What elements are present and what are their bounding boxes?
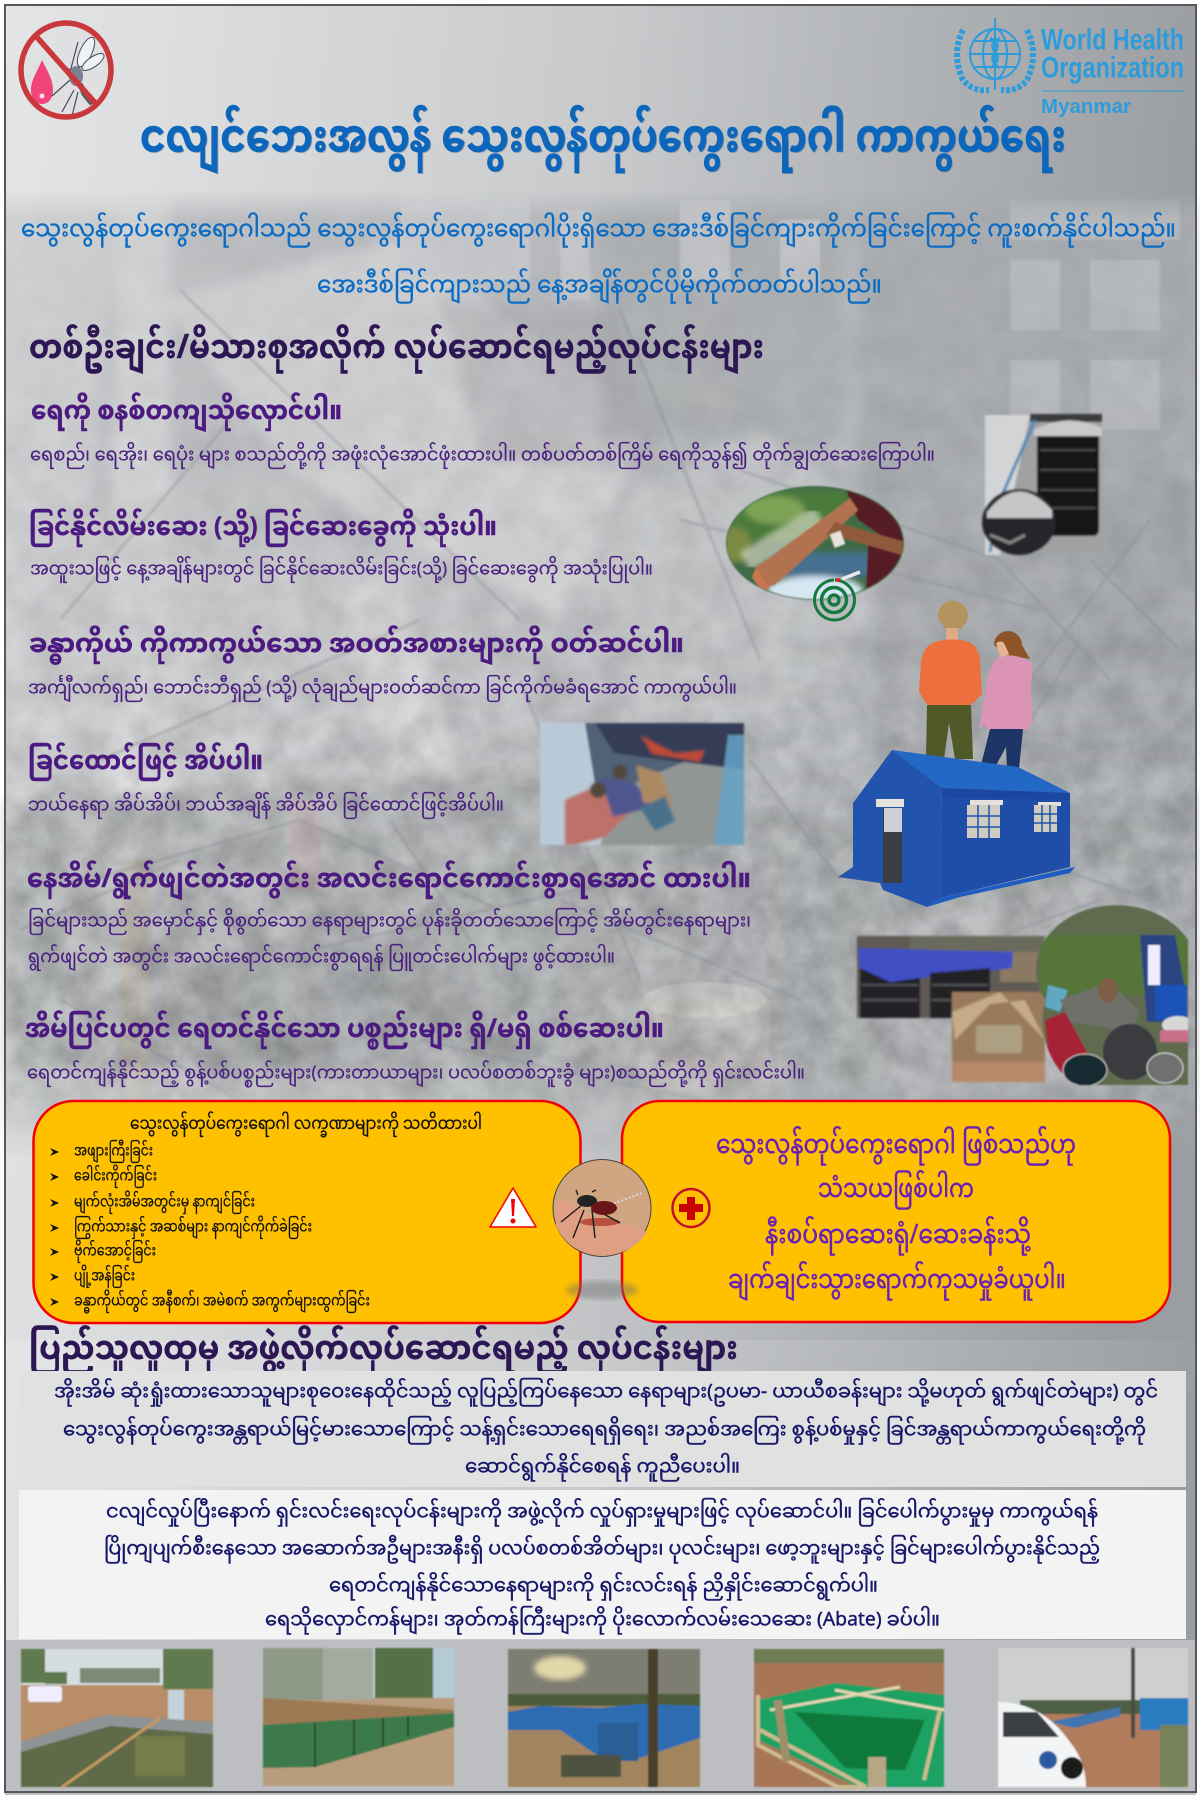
photo: lined wooden tank	[754, 1649, 944, 1787]
photo: applying repellent spray	[719, 486, 910, 604]
logo: WHO Myanmar	[957, 18, 1185, 118]
section: clothing	[28, 619, 737, 710]
section: repellent: အထူးသဖြင့် နေ့အချိန်များတွင် ခြင်နိုင်ဆေးလိမ်းခြင်း(သို့) ခြင်ဆေးခွေကို အသုံးပြုပါ။	[30, 552, 653, 590]
panel: seek care: သွေးလွန်တုပ်ကွေးရောဂါ ဖြစ်သည်ဟု	[716, 1120, 1076, 1176]
panel: crowded settings: ဆောင်ရွက်နိုင်စေရန် ကူညီပေးပါ။	[465, 1448, 740, 1490]
section: mosquito net: ဘယ်နေရာ အိပ်အိပ်၊ ဘယ်အချိန် အိပ်အိပ် ခြင်ထောင်ဖြင့်အိပ်ပါ။	[28, 788, 504, 826]
photo: cleaning water jars	[1036, 905, 1200, 1086]
symptoms list: ခေါင်းကိုက်ခြင်း	[74, 1160, 157, 1194]
photo: green water tanks	[263, 1648, 454, 1786]
section: light in tents: ရွက်ဖျင်တဲ အတွင်း အလင်းရောင်ကောင်းစွာရရန် ပြူတင်းပေါက်များ ဖွင့်ထားပါ။	[28, 940, 615, 978]
panel: seek care	[622, 1101, 1170, 1322]
section: clothing: အင်္ကျီလက်ရှည်၊ ဘောင်းဘီရှည် (သို့) လုံချည်များဝတ်ဆင်ကာ ခြင်ကိုက်မခံရအောင် ကာကွယ်ပါ။	[28, 670, 737, 710]
section: repellent: ခြင်နိုင်လိမ်းဆေး (သို့) ခြင်ဆေးခွေကို သုံးပါ။	[29, 502, 497, 558]
photo: tires and open well	[857, 936, 1045, 1082]
panel: seek care: နီးစပ်ရာဆေးရုံ/ဆေးခန်းသို့	[765, 1210, 1031, 1266]
section: mosquito net	[28, 736, 504, 826]
symptoms list: ဗိုက်အောင့်ခြင်း	[74, 1236, 156, 1268]
intro text: သွေးလွန်တုပ်ကွေးရောဂါသည် သွေးလွန်တုပ်ကွေးရောဂါပိုးရှိသော အေးဒီစ်ခြင်ကျားကိုက်ခြင်းကြောင့် ကူးစက်နိုင်ပါသည်။	[21, 204, 1176, 258]
panel: symptoms	[34, 1101, 580, 1323]
illustration: blue tent	[838, 750, 1075, 907]
panel: community clean-up: ပြိုကျပျက်စီးနေသော အဆောက်အဦများအနီးရှိ ပလပ်စတစ်အိတ်များ၊ ပုလင်းများ၊ ဖော့ဘူးများနှင့် ခြင်များပေါက်ပွားနိုင်သည့်	[104, 1530, 1100, 1572]
symptoms title: သွေးလွန်တုပ်ကွေးရောဂါ လက္ခဏာများကို သတိထားပါ	[130, 1106, 482, 1144]
section: check containers: ရေတင်ကျန်နိုင်သည့် စွန့်ပစ်ပစ္စည်းများ(ကားတာယာများ၊ ပလပ်စတစ်ဘူးခွံ များ)စသည်တို့ကို ရှင်းလင်းပါ။	[27, 1056, 805, 1094]
panel: seek care: ချက်ချင်းသွားရောက်ကုသမှုခံယူပါ။	[728, 1255, 1066, 1311]
panel: community clean-up	[19, 1490, 1186, 1642]
section: clothing: ခန္ဓာကိုယ် ကိုကာကွယ်သော အဝတ်အစားများကို ဝတ်ဆင်ပါ။	[29, 619, 684, 675]
photo: lined water pond	[21, 1649, 213, 1787]
panel: crowded settings: အိုးအိမ် ဆုံးရှုံးထားသောသူများစုဝေးနေထိုင်သည့် လူပြည့်ကြပ်နေသော နေရာများ(ဥပမာ- ယာယီစခန်းများ သို့မဟုတ် ရွက်ဖျင်တဲများ) တွင်	[54, 1374, 1158, 1414]
photo: camp road and vehicle	[998, 1648, 1188, 1787]
section: light in tents: ခြင်များသည် အမှောင်နှင့် စိုစွတ်သော နေရာများတွင် ပုန်းခိုတတ်သောကြောင့် အိမ်တွင်းနေရာများ၊	[28, 904, 751, 942]
photo: mosquito on skin	[553, 1160, 651, 1299]
intro text: အေးဒီစ်ခြင်ကျားသည် နေ့အချိန်တွင်ပိုမိုကိုက်တတ်ပါသည်။	[317, 260, 882, 314]
symptoms list: ကြွက်သားနှင့် အဆစ်များ နာကျင်ကိုက်ခဲခြင်း	[74, 1212, 312, 1244]
panel: community clean-up: ရေသိုလှောင်ကန်များ၊ အုတ်ကန်ကြီးများကို ပိုးလောက်လမ်းသေဆေး (Abate) ခပ်ပါ။	[265, 1602, 940, 1642]
illustration: two children	[919, 601, 1033, 769]
symptoms list	[50, 1136, 370, 1318]
section: repellent	[29, 502, 653, 590]
section: store water: ရေစည်၊ ရေအိုး၊ ရေပုံး များ စသည်တို့ကို အဖုံးလုံအောင်ဖုံးထားပါ။ တစ်ပတ်တစ်ကြိမ် ရေကိုသွန်၍ တိုက်ချွတ်ဆေးကြောပါ။	[30, 438, 935, 476]
symptoms list: အဖျားကြီးခြင်း	[74, 1136, 153, 1168]
symptoms list: ပျို့အန်ခြင်း	[74, 1260, 135, 1294]
symptoms list: မျက်လုံးအိမ်အတွင်းမှ နာကျင်ခြင်း	[74, 1186, 255, 1220]
section: check containers	[25, 1004, 805, 1094]
photo: covered water drums	[982, 414, 1102, 555]
panel: crowded settings	[19, 1371, 1186, 1490]
panel: community clean-up: ရေတင်ကျန်နိုင်သောနေရာများကို ရှင်းလင်းရန် ညှိနှိုင်းဆောင်ရွက်ပါ။	[329, 1568, 878, 1608]
section: light in tents	[27, 854, 751, 978]
symptoms list: ခန္ဓာကိုယ်တွင် အနီစက်၊ အမဲစက် အကွက်များထွက်ခြင်း	[74, 1286, 370, 1318]
section: store water: ရေကို စနစ်တကျသိုလှောင်ပါ။	[31, 386, 342, 442]
icon: medical cross	[672, 1189, 710, 1227]
intro text	[21, 204, 1176, 314]
panel: crowded settings: သွေးလွန်တုပ်ကွေးအန္တရာယ်မြင့်မားသောကြောင့် သန့်ရှင်းသောရေရရှိရေး၊ အညစ်အကြေး စွန့်ပစ်မှုနှင့် ခြင်အန္တရာယ်ကာကွယ်ရေးတို့ကို	[63, 1412, 1146, 1452]
photo: blue tent camp	[508, 1649, 700, 1787]
heading: community actions: ပြည်သူလူထုမှ အဖွဲ့လိုက်လုပ်ဆောင်ရမည့် လုပ်ငန်းများ	[29, 1316, 738, 1388]
icon: no mosquito sign	[21, 23, 111, 117]
icon: mosquito coil	[814, 572, 860, 620]
icon: warning triangle	[490, 1188, 536, 1227]
section: mosquito net: ခြင်ထောင်ဖြင့် အိပ်ပါ။	[28, 736, 263, 792]
section: store water	[30, 386, 935, 476]
panel: community clean-up: ငလျင်လှုပ်ပြီးနောက် ရှင်းလင်းရေးလုပ်ငန်းများကို အဖွဲ့လိုက် လှုပ်ရှားမှုများဖြင့် လုပ်ဆောင်ပါ။ ခြင်ပေါက်ပွားမှုမှ ကာကွယ်ရန်	[106, 1494, 1098, 1534]
photo: family under mosquito net	[540, 723, 744, 845]
panel: seek care: သံသယဖြစ်ပါက	[818, 1164, 974, 1220]
section: light in tents: နေအိမ်/ရွက်ဖျင်တဲအတွင်း အလင်းရောင်ကောင်းစွာရအောင် ထားပါ။	[27, 854, 751, 910]
logo: WHO Myanmar: Myanmar	[1041, 96, 1131, 118]
section: check containers: အိမ်ပြင်ပတွင် ရေတင်နိုင်သော ပစ္စည်းများ ရှိ/မရှိ စစ်ဆေးပါ။	[25, 1004, 664, 1060]
heading: individual and family actions: တစ်ဦးချင်း/မိသားစုအလိုက် လုပ်ဆောင်ရမည့်လုပ်ငန်းများ	[29, 315, 764, 387]
